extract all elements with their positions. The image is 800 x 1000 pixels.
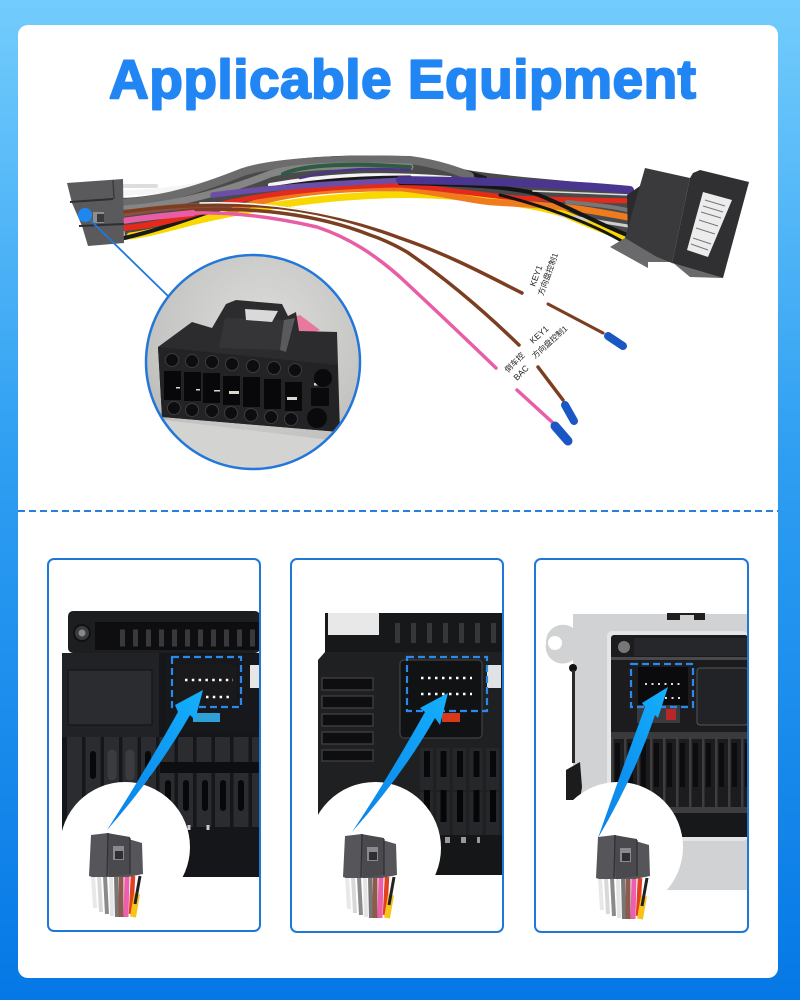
- arrow: [352, 693, 448, 832]
- wire tags: KEY1: [528, 323, 551, 345]
- panel 1: head unit with black back: [40, 559, 265, 937]
- bottom row of holes: [168, 402, 298, 426]
- wire tags: 方向盘控制1: [530, 323, 570, 360]
- wire tags: BAC: [511, 363, 531, 382]
- wire tags: 倒车控: [502, 350, 526, 374]
- dashed highlight box: [631, 664, 693, 707]
- wiring harness: [67, 157, 749, 441]
- middle contact slots: [164, 371, 302, 411]
- arrow: [598, 687, 668, 838]
- side pin column: [307, 369, 332, 428]
- arrow: [107, 690, 203, 830]
- device photo: [318, 613, 503, 875]
- dashed highlight box: [172, 657, 241, 707]
- white circle behind connector: [318, 782, 441, 875]
- wire tags: 方向盘控制1: [535, 251, 560, 297]
- mini connector: [343, 834, 397, 918]
- title: Applicable Equipment: [109, 48, 696, 110]
- right connector: [610, 168, 749, 278]
- device photo: [62, 611, 260, 877]
- panel frame: [535, 559, 748, 932]
- wire tags: KEY1: [527, 264, 544, 288]
- mini connector: [596, 835, 650, 919]
- circular inset: connector close-up: [146, 255, 360, 470]
- loose wires: [120, 203, 603, 422]
- white circle behind connector: [573, 782, 683, 890]
- device photo: [546, 613, 748, 890]
- panel 2: head unit with finned side: [285, 559, 510, 935]
- metal contact pins: [176, 383, 318, 400]
- callout: leader line and dot: [78, 208, 168, 296]
- wire tips: [555, 336, 623, 441]
- mini connector: [89, 833, 143, 917]
- wire tags: [502, 251, 570, 382]
- wire bundle: [120, 157, 637, 243]
- white circle behind connector: [62, 782, 190, 877]
- left connector: [67, 179, 124, 246]
- panel frame: [48, 559, 260, 931]
- dashed highlight box: [407, 657, 487, 711]
- panel frame: [291, 559, 503, 932]
- panel 3: head unit with silver bracket: [530, 559, 755, 940]
- dashed divider: [18, 510, 778, 512]
- top row of holes: [166, 354, 302, 376]
